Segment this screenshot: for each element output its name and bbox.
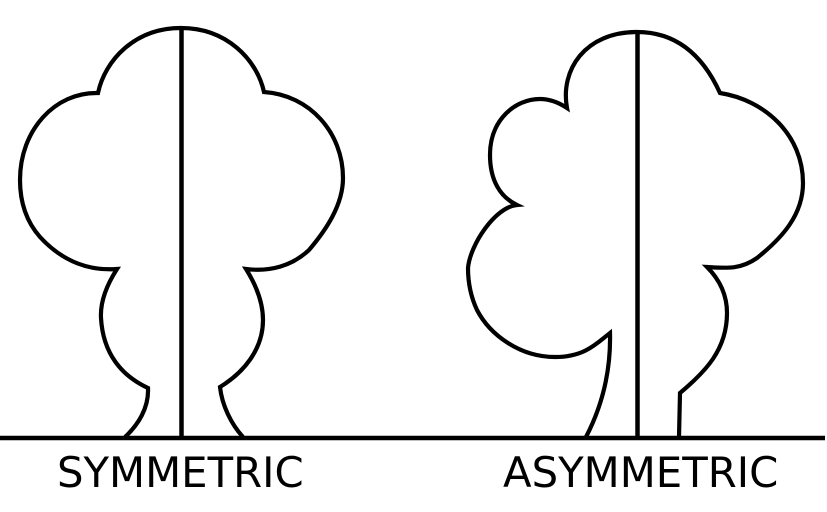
asymmetric tree (468, 32, 803, 437)
symmetric tree axis (179, 28, 184, 437)
symmetric tree (20, 28, 343, 437)
label: symmetric: SYMMETRIC (57, 448, 304, 497)
asymmetric tree outline (468, 32, 803, 437)
asymmetric tree axis (635, 32, 640, 437)
label: asymmetric: ASYMMETRIC (503, 448, 778, 497)
ground line (0, 436, 825, 440)
symmetric tree outline (20, 28, 343, 437)
